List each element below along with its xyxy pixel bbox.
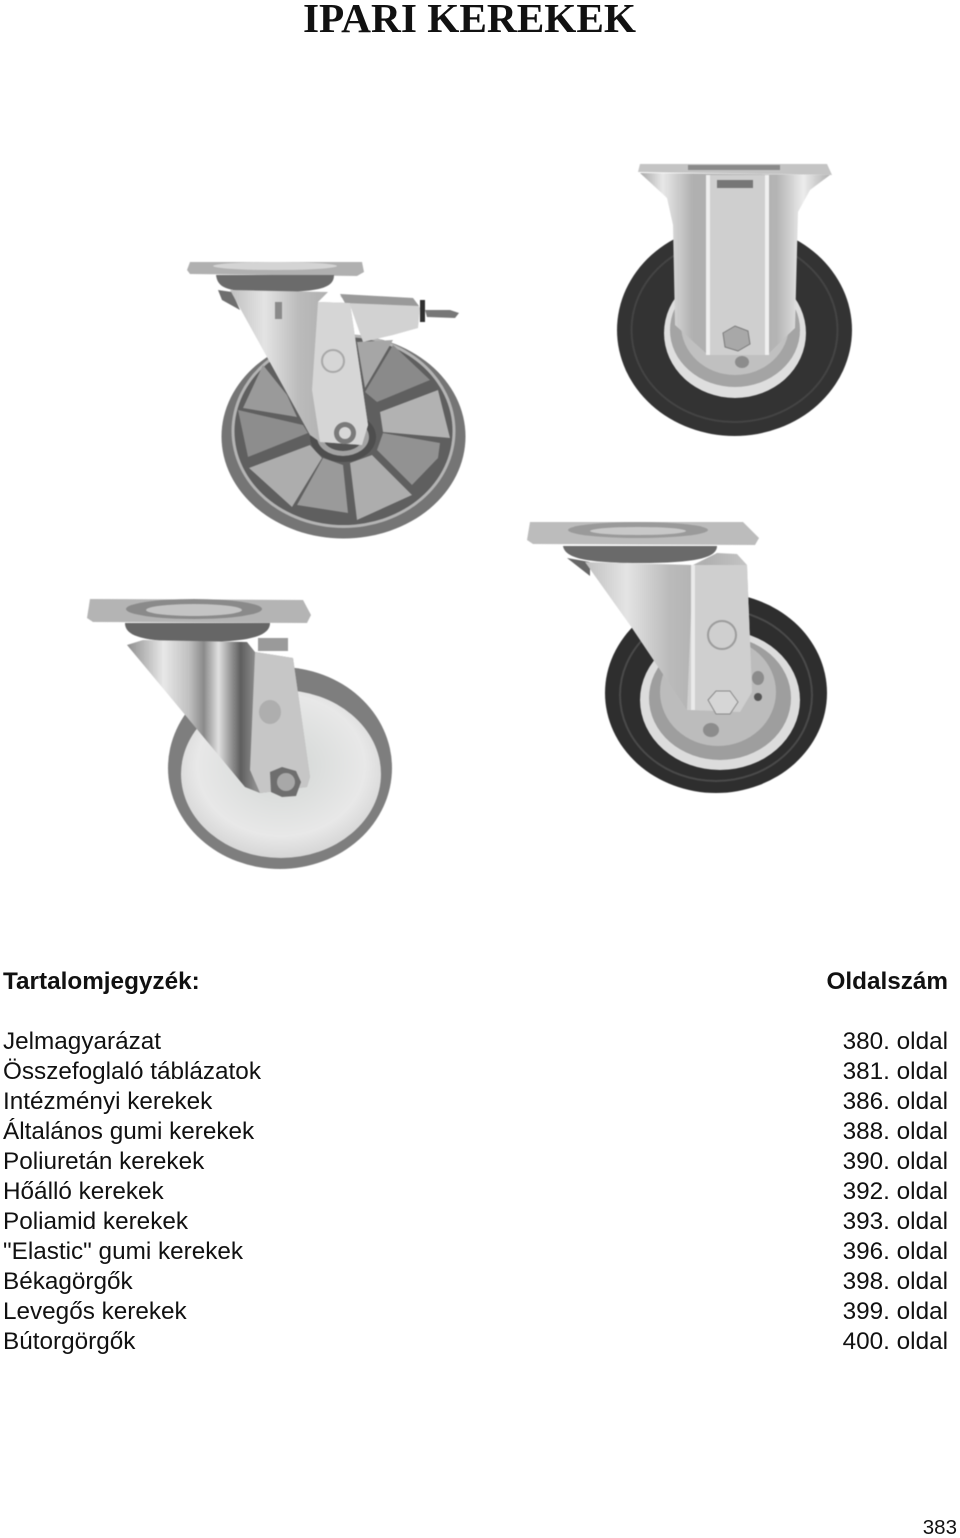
table of contents: chapter names: Általános gumi kerekek (3, 1118, 254, 1145)
table of contents: chapter names: Intézményi kerekek (3, 1088, 212, 1115)
table of contents: page numbers: 399. oldal (843, 1298, 948, 1325)
brake lever (340, 294, 459, 342)
table of contents: page numbers: 380. oldal (843, 1028, 948, 1055)
tyre (617, 224, 852, 436)
fork (127, 638, 310, 793)
table of contents: chapter names: Poliamid kerekek (3, 1208, 188, 1235)
table of contents: chapter names: Hőálló kerekek (3, 1178, 164, 1205)
rim (664, 268, 806, 398)
table of contents: chapter names: "Elastic" gumi kerekek (3, 1238, 243, 1265)
axle nut (270, 767, 301, 797)
table of contents: chapter names: Összefoglaló táblázatok (3, 1058, 261, 1085)
table of contents: chapter names (3, 1028, 261, 1355)
table of contents: page numbers: 400. oldal (843, 1328, 948, 1355)
axle bolt (334, 422, 356, 444)
swivel ring (125, 623, 270, 642)
caster 3: swivel, white nylon wheel (87, 599, 392, 869)
caster 4: swivel, black rubber wheel (527, 522, 827, 793)
table of contents: page numbers (843, 1028, 948, 1355)
table of contents heading: Tartalomjegyzék: (3, 968, 200, 995)
table of contents: page numbers: 381. oldal (843, 1058, 948, 1085)
table of contents: chapter names: Poliuretán kerekek (3, 1148, 204, 1175)
wheel: spoked (222, 334, 466, 538)
top plate (187, 262, 364, 276)
wheel (168, 667, 392, 869)
table of contents: page numbers: 392. oldal (843, 1178, 948, 1205)
fork (640, 173, 830, 355)
caster 2: fixed, black rubber wheel (617, 164, 852, 436)
rim (640, 630, 800, 770)
page number column heading: Oldalszám (826, 968, 948, 995)
table of contents: chapter names: Levegős kerekek (3, 1298, 187, 1325)
top plate (87, 599, 311, 623)
swivel ring (563, 546, 717, 563)
table of contents: chapter names: Jelmagyarázat (3, 1028, 161, 1055)
table of contents: page numbers: 396. oldal (843, 1238, 948, 1265)
table of contents: page numbers: 393. oldal (843, 1208, 948, 1235)
axle bolt (708, 691, 738, 714)
table of contents: page numbers: 398. oldal (843, 1268, 948, 1295)
fork (230, 290, 368, 445)
swivel ring (216, 275, 334, 292)
axle bolt (723, 326, 750, 368)
caster photographs (86, 164, 853, 870)
tyre (605, 593, 827, 793)
top plate (638, 164, 832, 175)
caster 1: swivel with brake, grey spoked wheel (187, 262, 466, 538)
table of contents: chapter names: Békagörgők (3, 1268, 133, 1295)
table of contents: chapter names: Bútorgörgők (3, 1328, 135, 1355)
table of contents: page numbers: 390. oldal (843, 1148, 948, 1175)
fork (567, 553, 752, 712)
top plate (527, 522, 759, 545)
table of contents: page numbers: 388. oldal (843, 1118, 948, 1145)
table of contents: page numbers: 386. oldal (843, 1088, 948, 1115)
